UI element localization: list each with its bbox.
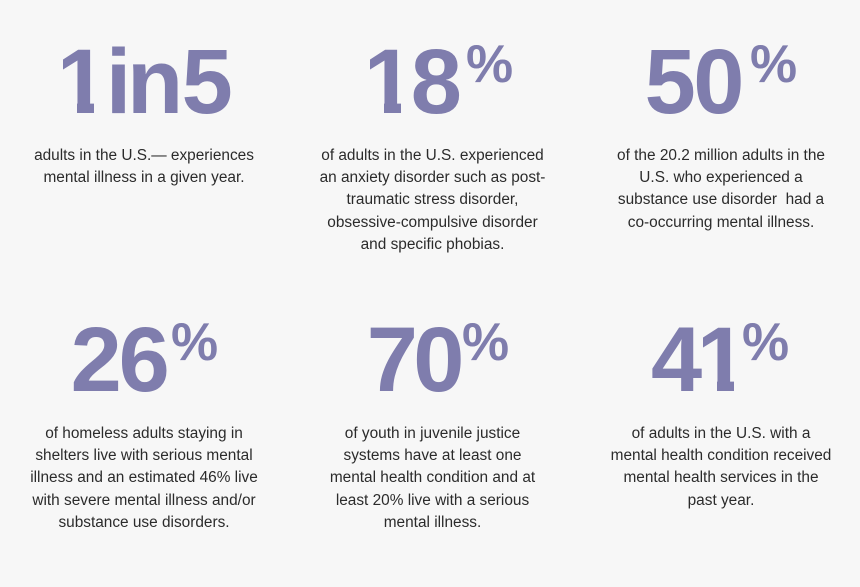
text: 26 percent description: of homeless adults staying in: [45, 425, 243, 442]
percent sign: 41: %: [742, 312, 789, 372]
text: 70 percent description: [330, 425, 536, 531]
stat: 41: [651, 309, 734, 411]
stat: 18: 8: [411, 31, 462, 133]
text: 50 percent description: [617, 147, 825, 231]
text: 18 percent description: an anxiety disorder such as post-: [320, 169, 545, 186]
text: 26 percent description: substance use disorders.: [58, 514, 230, 531]
text: 41 percent description: [611, 425, 831, 509]
text: 70 percent description: systems have at least one: [344, 447, 521, 464]
text: 26 percent description: shelters live with serious mental: [35, 447, 253, 464]
text: 41 percent description: mental health services in the: [623, 469, 819, 486]
text: 26 percent description: illness and an estimated 46% live: [30, 469, 258, 486]
text: 18 percent description: and specific phobias.: [361, 236, 504, 253]
text: 70 percent description: mental illness.: [384, 514, 481, 531]
text: 41 percent description: past year.: [688, 492, 754, 509]
text: 26 percent description: with severe mental illness and/or: [32, 492, 256, 509]
stat: 1 in 5: 5: [182, 31, 233, 133]
stat: 41: 4: [651, 309, 702, 411]
stat: 70: 0: [413, 309, 464, 411]
stat: 50: [645, 31, 744, 133]
text: 70 percent description: mental health condition and at: [330, 469, 535, 486]
stat: 18: 1: [363, 31, 414, 133]
stat: 70: [367, 309, 464, 411]
stat: 50: 5: [645, 31, 696, 133]
percent sign: 18: %: [466, 34, 513, 94]
text: 41 percent description: of adults in the U.S. with a: [632, 425, 810, 442]
percent sign: 50: %: [750, 34, 797, 94]
stat: 1 in 5: 1: [56, 31, 107, 133]
stat: 50: 0: [693, 31, 744, 133]
text: 70 percent description: of youth in juvenile justice: [345, 425, 520, 442]
text: 26 percent description: [30, 425, 258, 531]
text: 50 percent description: of the 20.2 million adults in the: [617, 147, 825, 164]
text: 50 percent description: substance use disorder had a: [618, 191, 824, 208]
text: 18 percent description: [320, 147, 545, 253]
stat: 18: [370, 31, 462, 133]
percent sign: 70: %: [462, 312, 509, 372]
text: 1 in 5 description: [34, 147, 254, 186]
text: 18 percent description: of adults in the U.S. experienced: [321, 147, 544, 164]
stat: 26: 6: [119, 309, 170, 411]
percent sign: 26: %: [171, 312, 218, 372]
text: 1 in 5 description: mental illness in a given year.: [43, 169, 245, 186]
text: 50 percent description: U.S. who experienced a: [639, 169, 803, 186]
stat: 1 in 5: n: [127, 31, 183, 133]
stat: 41: 1: [696, 309, 747, 411]
text: 1 in 5 description: adults in the U.S.— experiences: [34, 147, 254, 164]
text: 41 percent description: mental health condition received: [611, 447, 831, 464]
stat: 26: [71, 309, 170, 411]
text: 70 percent description: least 20% live with a serious: [336, 492, 529, 509]
text: 50 percent description: co-occurring mental illness.: [628, 214, 814, 231]
text: 18 percent description: traumatic stress disorder,: [347, 191, 518, 208]
stat: 26: 2: [71, 309, 122, 411]
stat: 70: 7: [367, 309, 418, 411]
stat: 1 in 5: i: [106, 31, 131, 133]
text: 18 percent description: obsessive-compulsive disorder: [327, 214, 538, 231]
stat: 1 in 5: [63, 31, 233, 133]
